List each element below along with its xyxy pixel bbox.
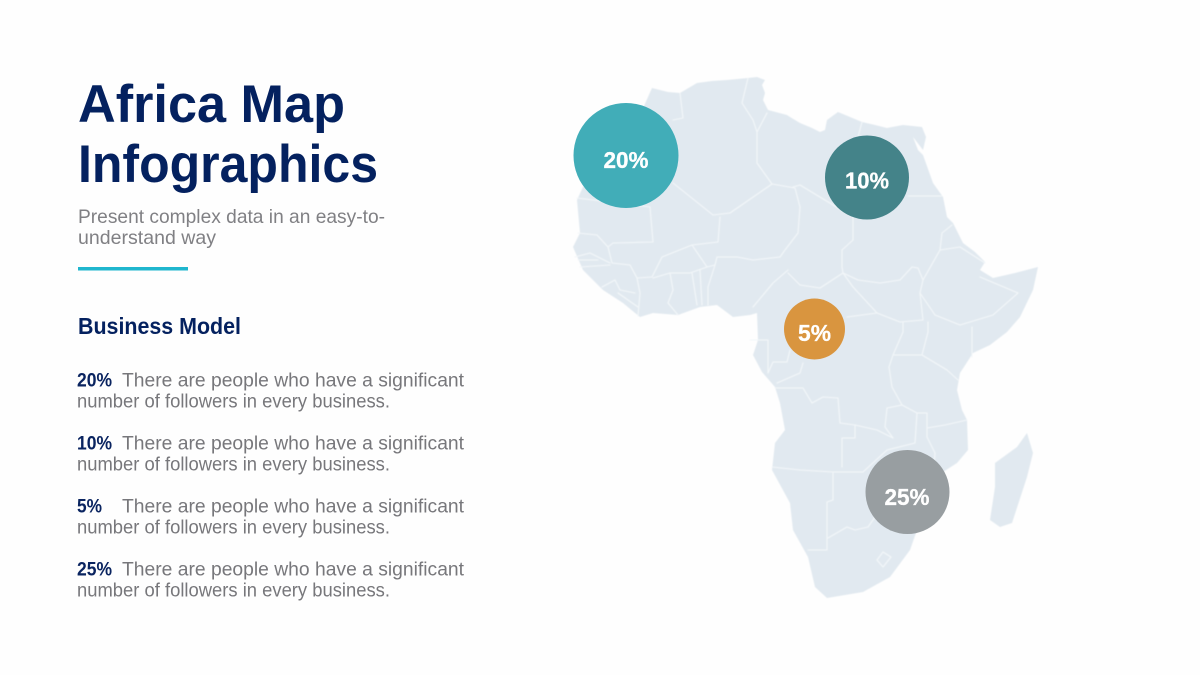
- country borders: [575, 78, 1018, 567]
- list item: 20%: There are people who have a significant: [122, 370, 465, 392]
- section heading: Business Model: [78, 313, 241, 339]
- marker: 10%: 10%: [845, 168, 889, 194]
- title: [78, 75, 378, 194]
- list item: 20%: number of followers in every business.: [77, 392, 390, 412]
- list item: 20%: 20%: [77, 370, 112, 392]
- list item: 25%: [77, 560, 465, 602]
- marker: 20%: [574, 103, 678, 208]
- mainland silhouette: [573, 77, 1038, 598]
- list item: 25%: There are people who have a significant: [122, 560, 465, 580]
- list item: 10%: There are people who have a significant: [122, 434, 465, 454]
- list item: 5%: number of followers in every business.: [77, 518, 390, 538]
- map of Africa: [573, 77, 1038, 598]
- marker: 25%: 25%: [884, 484, 930, 510]
- list item: 10%: [77, 434, 465, 476]
- title: Africa Map: [78, 75, 345, 134]
- list item: 10%: 10%: [77, 434, 112, 454]
- marker: 25%: [866, 450, 950, 534]
- list item: 5%: [77, 496, 465, 538]
- marker: 5%: 5%: [798, 320, 831, 346]
- list item: 25%: 25%: [77, 560, 112, 580]
- marker: 10%: [825, 136, 909, 220]
- marker: 5%: [784, 298, 845, 360]
- Madagascar: [990, 433, 1033, 527]
- list item: 10%: number of followers in every business.: [77, 454, 390, 476]
- title: Infographics: [78, 135, 378, 194]
- marker: 20%: 20%: [604, 147, 648, 173]
- list item: 5%: 5%: [77, 496, 102, 518]
- list item: 25%: number of followers in every business.: [77, 580, 390, 602]
- subtitle: Present complex data in an easy-to-: [78, 206, 385, 228]
- list item: 5%: There are people who have a significant: [122, 496, 465, 518]
- accent rule: [78, 267, 188, 270]
- subtitle: [78, 206, 385, 249]
- list item: 20%: [77, 370, 465, 412]
- subtitle: understand way: [78, 227, 216, 249]
